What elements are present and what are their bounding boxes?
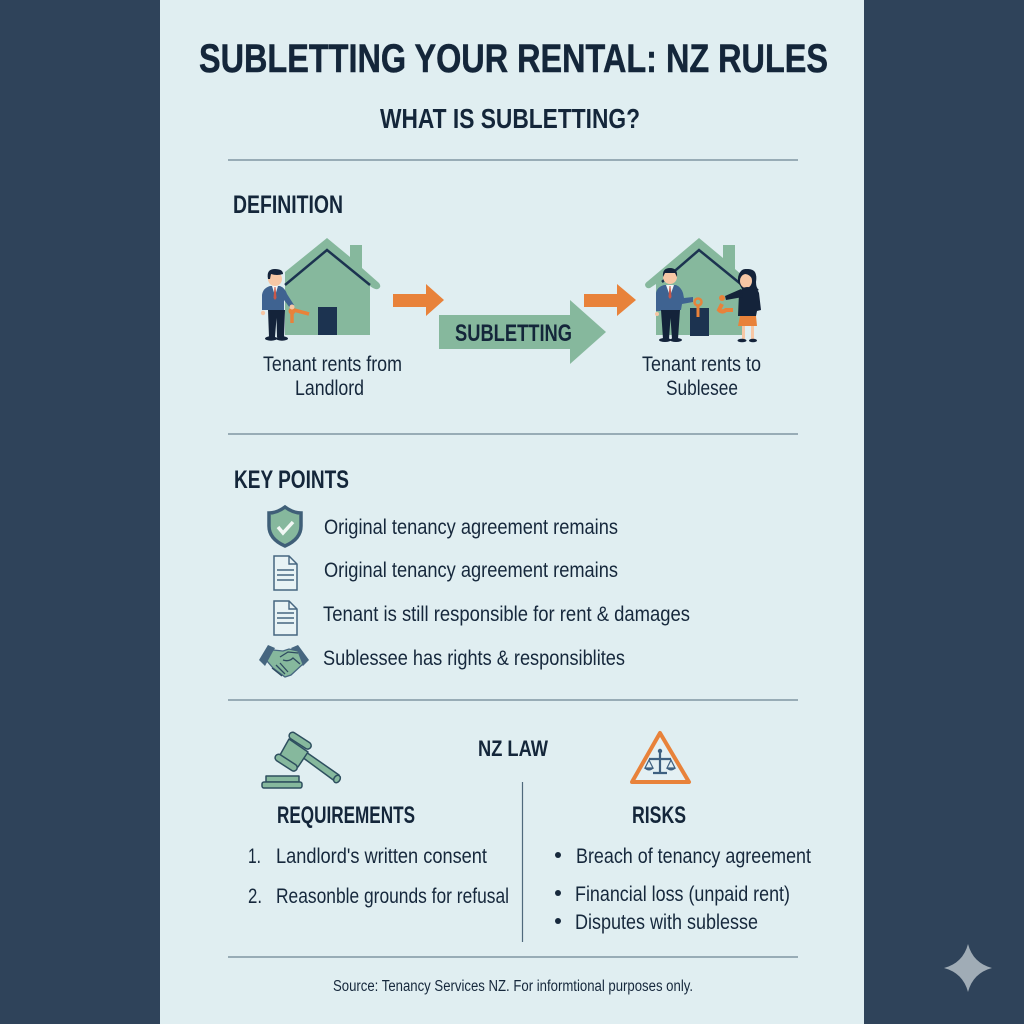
caption: tenant rents to sublessee: Sublesee [666,377,738,400]
list item 1: 1. [248,845,261,868]
diagram: tenant rents to sublessee [642,238,761,400]
risk 2: Financial loss (unpaid rent) [575,883,790,906]
key point 2 [274,556,618,590]
title: SUBLETTING YOUR RENTAL: NZ RULES [199,37,828,81]
list item 1: Landlord's written consent [276,845,487,868]
arrow: subletting: SUBLETTING [455,320,572,347]
heading: NZ law: NZ LAW [478,736,548,761]
heading: requirements: REQUIREMENTS [277,802,415,829]
column: requirements [248,802,509,908]
panel: main sheet [160,0,864,1024]
arrow: orange right [584,284,636,316]
heading: definition: DEFINITION [233,191,343,219]
icon: tenant with key [261,269,309,341]
subtitle: WHAT IS SUBLETTING? [380,103,640,134]
source note: Source: Tenancy Services NZ. For informtional purposes only. [333,978,693,995]
icon: handshake [259,645,309,677]
icon: house left [285,238,380,335]
list item 2: 2. [248,885,262,908]
arrow: orange left [393,284,444,316]
icon: sublessee with key [719,269,761,342]
caption: tenant rents to sublessee: Tenant rents to [642,353,761,376]
key point 4 [259,645,625,677]
arrow: subletting [439,300,606,364]
key point 1: Original tenancy agreement remains [324,516,618,539]
risk 1: Breach of tenancy agreement [576,845,811,868]
column: risks [555,802,811,934]
icon: document [274,601,297,635]
diagram: tenant rents from landlord [261,238,402,400]
key point 2: Original tenancy agreement remains [324,559,618,582]
icon: tenant handing key [655,268,702,342]
key point 4: Sublessee has rights & responsiblites [323,647,625,670]
caption: tenant rents from landlord: Tenant rents from [263,353,402,376]
key point 1 [269,507,618,546]
heading: risks: RISKS [632,802,686,829]
icon: house right [645,238,752,336]
list item 2: Reasonble grounds for refusal [276,885,509,908]
heading: key points: KEY POINTS [234,466,349,494]
icon: warning triangle with scales [632,733,689,782]
risk 3: Disputes with sublesse [575,911,758,934]
key point 3 [274,601,690,635]
icon: document [274,556,297,590]
icon: sparkle watermark [944,944,992,992]
key point 3: Tenant is still responsible for rent & damages [323,603,690,626]
caption: tenant rents from landlord: Landlord [295,377,364,400]
icon: shield check [269,507,301,546]
icon: gavel [262,731,342,788]
